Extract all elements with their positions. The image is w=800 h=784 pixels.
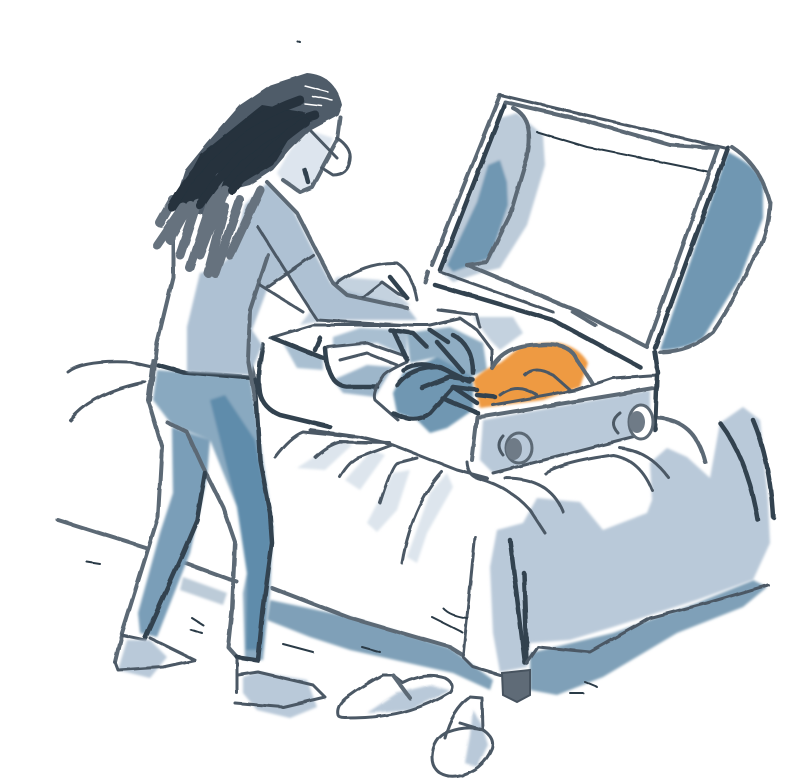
bed outline and folds [58, 41, 773, 693]
lid inside washes [440, 113, 763, 350]
woman: feet [115, 638, 325, 718]
open suitcase lid [425, 95, 770, 373]
bed leg [502, 670, 530, 702]
slippers [338, 675, 493, 776]
suitcase clasp right [613, 405, 653, 439]
woman: head and glasses [277, 117, 350, 192]
lid outlines [425, 95, 770, 373]
suitcase clasp left [499, 433, 532, 463]
woman: torso and arm [150, 182, 417, 400]
bedding washes [283, 277, 523, 433]
suitcase body [472, 375, 657, 473]
woman: hair [157, 73, 342, 273]
floor shadows [180, 577, 767, 695]
woman: trousers [115, 360, 273, 662]
orange clothing [473, 343, 588, 408]
bundle lines [270, 310, 592, 420]
bed cover wash [297, 407, 770, 672]
clothes bundle [270, 277, 592, 433]
